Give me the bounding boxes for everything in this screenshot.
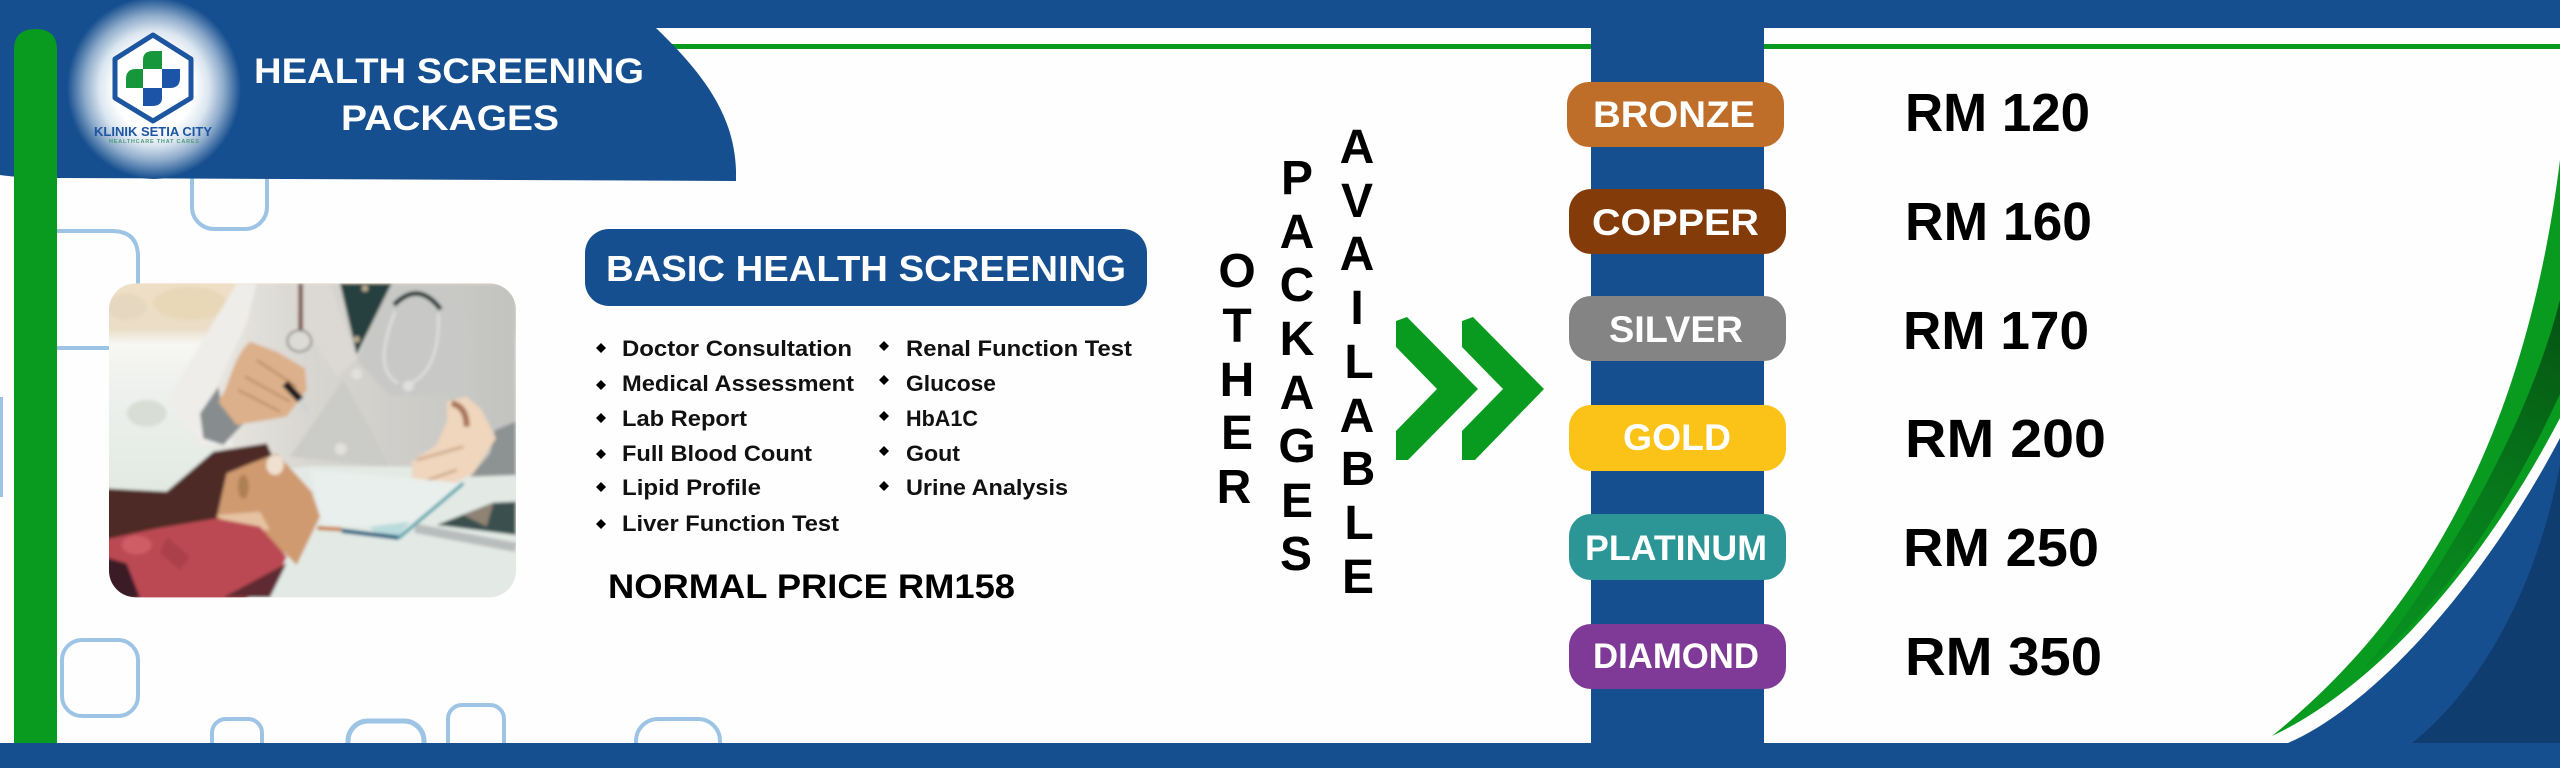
logo tagline: HEALTHCARE THAT CARES — [109, 139, 199, 145]
word: packages: P — [1281, 152, 1313, 205]
list: included tests, left column: Full Blood Count — [622, 441, 813, 466]
title: PACKAGES — [341, 99, 559, 138]
package: gold: GOLD — [1623, 417, 1731, 458]
price: copper: RM 160 — [1905, 192, 2092, 252]
bottom band — [0, 743, 2560, 768]
word: available: V — [1341, 175, 1373, 228]
list: included tests, right column: HbA1C — [906, 406, 978, 431]
word: available — [1340, 121, 1375, 604]
top band — [0, 0, 2560, 28]
word: other: E — [1221, 407, 1253, 460]
heading pill: BASIC HEALTH SCREENING — [606, 248, 1126, 289]
word: other: T — [1222, 300, 1252, 353]
word: available: I — [1350, 282, 1364, 335]
icon: hexagon with cross — [115, 35, 191, 121]
word: packages: G — [1278, 420, 1316, 473]
title: HEALTH SCREENING — [254, 52, 644, 91]
package: platinum: PLATINUM — [1585, 529, 1767, 568]
word: available: A — [1340, 228, 1374, 281]
word: other: H — [1220, 354, 1254, 407]
price: diamond: RM 350 — [1905, 627, 2102, 687]
prices — [1903, 83, 2106, 687]
list: included tests, right column — [879, 336, 1133, 500]
word: other: O — [1218, 245, 1256, 298]
normal price: NORMAL PRICE RM158 — [608, 568, 1015, 606]
word: available: A — [1340, 390, 1374, 443]
price: silver: RM 170 — [1903, 301, 2089, 361]
arrow: double chevron — [1396, 317, 1544, 460]
photo: doctor consulting patient — [103, 277, 523, 603]
package: silver — [1569, 296, 1786, 361]
left green bar — [14, 29, 57, 743]
swoosh: dark green inner — [2365, 300, 2560, 668]
word: packages: A — [1280, 367, 1314, 420]
package: diamond: DIAMOND — [1593, 637, 1759, 676]
word: available: E — [1342, 551, 1374, 604]
title — [254, 52, 644, 138]
price: gold: RM 200 — [1905, 409, 2106, 469]
package: bronze: BRONZE — [1593, 94, 1755, 135]
pricing column — [1591, 0, 1764, 768]
list: included tests, right column: Glucose — [906, 371, 996, 396]
word: packages — [1278, 152, 1316, 581]
swoosh: green blade — [2272, 160, 2560, 736]
list: included tests, left column: Liver Function Test — [622, 511, 840, 536]
package: copper — [1569, 189, 1786, 254]
list: included tests, right column: Renal Function Test — [906, 336, 1133, 361]
list: included tests, left column: Lab Report — [622, 406, 748, 431]
corner swoosh — [2272, 160, 2560, 743]
package: silver: SILVER — [1609, 309, 1743, 350]
package: copper: COPPER — [1592, 202, 1759, 243]
word: available: L — [1344, 497, 1374, 550]
list: included tests, left column: Doctor Consultation — [622, 336, 852, 361]
list: included tests, left column: Lipid Profile — [622, 475, 761, 500]
word: packages: K — [1280, 313, 1315, 366]
word: packages: C — [1280, 259, 1314, 312]
list: included tests, right column: Gout — [906, 441, 961, 466]
list: included tests, right column: Urine Analysis — [906, 475, 1068, 500]
vertical text: other packages available — [1217, 121, 1375, 604]
word: packages: E — [1281, 475, 1313, 528]
logo name: KLINIK SETIA CITY — [94, 124, 212, 139]
package: gold — [1569, 405, 1786, 471]
package: bronze — [1567, 82, 1784, 147]
word: packages: A — [1280, 206, 1314, 259]
green rule under top band — [660, 44, 2560, 49]
word: available: B — [1341, 443, 1375, 496]
word: available: A — [1340, 121, 1374, 174]
package: platinum — [1569, 514, 1786, 580]
word: other — [1217, 245, 1256, 514]
word: other: R — [1217, 461, 1251, 514]
logo: Klinik Setia City — [67, 0, 241, 179]
word: packages: S — [1280, 528, 1312, 581]
swoosh: navy inner — [2412, 465, 2560, 743]
price: platinum: RM 250 — [1903, 518, 2099, 578]
panel: header banner — [0, 0, 736, 181]
swoosh: blue base — [2288, 438, 2560, 743]
word: available: L — [1344, 336, 1374, 389]
panel: basic health screening details — [585, 229, 1147, 606]
price: bronze: RM 120 — [1905, 83, 2090, 143]
list: included tests, left column: Medical Assessment — [622, 371, 855, 396]
heading pill — [585, 229, 1147, 306]
list: included tests, left column — [596, 336, 855, 536]
package: diamond — [1569, 624, 1786, 689]
logo glow — [67, 0, 241, 179]
